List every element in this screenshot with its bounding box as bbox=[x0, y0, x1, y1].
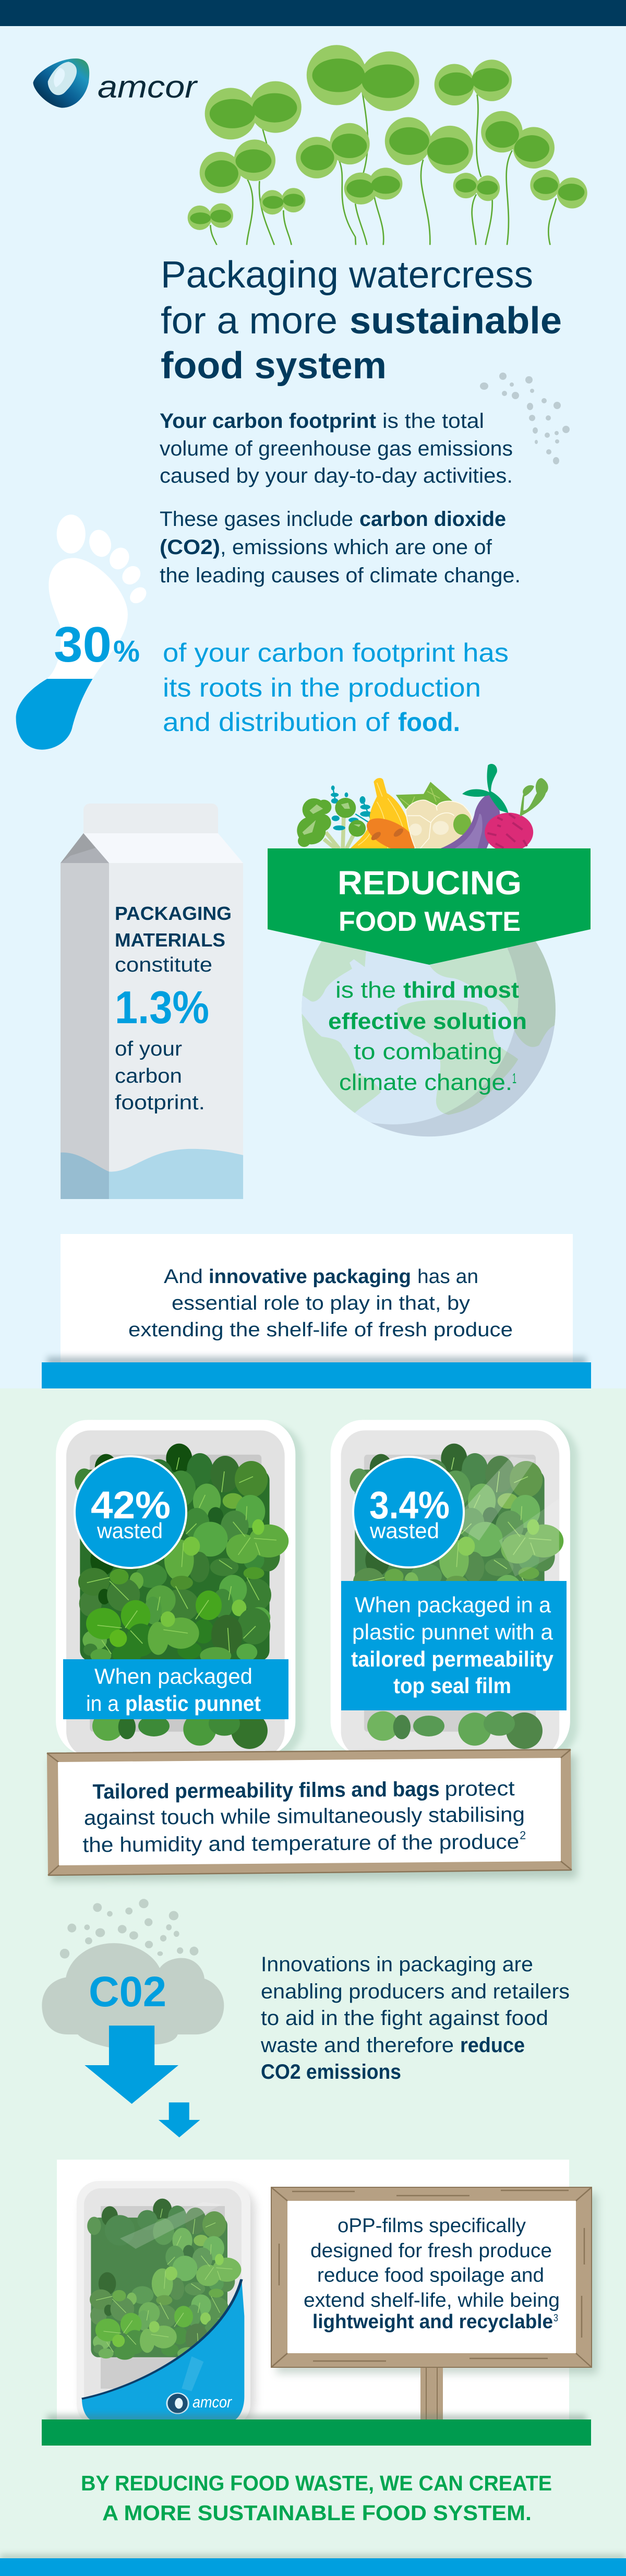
icon: footprint filled 30 percent bbox=[16, 514, 149, 750]
30% explanation text: of your carbon footprint has bbox=[163, 638, 509, 667]
CO2 dots above the cloud bbox=[60, 1899, 198, 1959]
decorative CO2 dots near the title bbox=[480, 373, 570, 464]
30% explanation text: food. bbox=[398, 708, 460, 737]
carbon footprint definition text: Your carbon footprint bbox=[160, 410, 376, 433]
wooden sign: tailored permeability films: Tailored permeability films and bags bbox=[92, 1778, 440, 1803]
carbon footprint definition text: These gases include bbox=[160, 508, 353, 531]
wooden sign: tailored permeability films: protect bbox=[444, 1777, 515, 1801]
wooden sign: tailored permeability films: against touch while simultaneously stabilising bbox=[84, 1803, 525, 1829]
carton text: packaging materials 1.3%: MATERIALS bbox=[115, 929, 225, 951]
globe text: third most effective solution: third most bbox=[403, 977, 519, 1003]
title: for a more bbox=[161, 300, 338, 342]
wooden sign: oPP films bbox=[271, 2187, 597, 2419]
innovations text: waste and therefore bbox=[260, 2034, 454, 2057]
punnet: tailored permeability top seal film, 3.4% wasted bbox=[331, 1420, 578, 1759]
carton text: packaging materials 1.3%: PACKAGING bbox=[115, 903, 232, 924]
carbon footprint definition text: caused by your day-to-day activities. bbox=[160, 464, 513, 487]
green shelf band bbox=[42, 2419, 591, 2446]
icon: CO2 cloud: C02 bbox=[89, 1968, 166, 2016]
wooden sign: oPP films: 3 bbox=[553, 2313, 558, 2324]
top navy band bbox=[0, 0, 626, 26]
title: Packaging watercress bbox=[161, 254, 533, 296]
banner: reducing food waste bbox=[268, 848, 591, 965]
punnet: plastic punnet, 42% wasted: wasted bbox=[97, 1518, 163, 1543]
wooden sign: oPP films: extend shelf-life, while being bbox=[304, 2290, 560, 2311]
title: sustainable bbox=[350, 300, 562, 342]
30% statistic: % bbox=[113, 634, 140, 668]
icon: CO2 cloud bbox=[42, 1943, 224, 2050]
punnet: plastic punnet, 42% wasted: plastic punnet bbox=[125, 1691, 261, 1716]
punnet: plastic punnet, 42% wasted: in a bbox=[86, 1691, 119, 1716]
innovations text bbox=[260, 1953, 570, 2083]
punnet: plastic punnet, 42% wasted: 42% bbox=[91, 1483, 171, 1527]
punnet: tailored permeability top seal film, 3.4% wasted: top seal film bbox=[393, 1673, 511, 1698]
30% explanation text bbox=[163, 638, 509, 737]
carton text: packaging materials 1.3%: footprint. bbox=[115, 1092, 205, 1114]
globe text: third most effective solution: to combating bbox=[354, 1039, 502, 1064]
globe text: third most effective solution: climate change. bbox=[339, 1070, 512, 1095]
carbon footprint definition text: the leading causes of climate change. bbox=[160, 564, 521, 587]
wooden sign: oPP films: designed for fresh produce bbox=[310, 2240, 552, 2262]
punnet: tailored permeability top seal film, 3.4% wasted: 3.4% bbox=[369, 1483, 450, 1527]
innovations text: to aid in the fight against food bbox=[261, 2007, 548, 2030]
globe text: third most effective solution: is the bbox=[335, 977, 396, 1003]
carbon footprint definition text bbox=[160, 410, 521, 587]
punnet: plastic punnet, 42% wasted bbox=[56, 1420, 304, 1759]
white panel: innovative packaging: has an bbox=[417, 1266, 478, 1288]
carton text: packaging materials 1.3%: carbon bbox=[115, 1065, 182, 1087]
vegetables illustration bbox=[297, 764, 548, 858]
carton text: packaging materials 1.3%: 1.3% bbox=[115, 981, 209, 1033]
wooden sign: tailored permeability films: 2 bbox=[520, 1829, 526, 1842]
globe bbox=[302, 941, 556, 1136]
carton text: packaging materials 1.3%: constitute bbox=[115, 954, 212, 976]
30% explanation text: and distribution of bbox=[163, 708, 389, 737]
wooden sign: tailored permeability films bbox=[47, 1750, 577, 1882]
innovations text: Innovations in packaging are bbox=[261, 1953, 533, 1976]
punnet: tailored permeability top seal film, 3.4% wasted: plastic punnet with a bbox=[352, 1620, 553, 1644]
white panel: oPP films bbox=[57, 2160, 569, 2421]
white panel: innovative packaging: And bbox=[164, 1266, 203, 1288]
innovations text: reduce bbox=[460, 2034, 525, 2057]
banner: reducing food waste: FOOD WASTE bbox=[339, 906, 521, 937]
30% explanation text: its roots in the production bbox=[163, 673, 481, 702]
white panel: innovative packaging: innovative packaging bbox=[209, 1266, 411, 1288]
packaged watercress with amcor film bbox=[77, 2181, 256, 2426]
title: food system bbox=[161, 345, 387, 387]
shadow above green shelf bbox=[47, 2415, 586, 2423]
banner: reducing food waste: REDUCING bbox=[338, 864, 522, 902]
shadow above bottom band bbox=[0, 2555, 626, 2561]
packaged watercress with amcor film: amcor bbox=[192, 2393, 232, 2411]
carbon footprint definition text: (CO2) bbox=[160, 536, 220, 559]
white panel: innovative packaging bbox=[47, 1234, 586, 1367]
innovations text: enabling producers and retailers bbox=[261, 1980, 570, 2003]
carton text: packaging materials 1.3% bbox=[115, 903, 232, 1114]
background: light green section bbox=[0, 1388, 626, 2576]
amcor logo bbox=[33, 58, 198, 108]
title bbox=[161, 254, 562, 387]
punnet: tailored permeability top seal film, 3.4% wasted: When packaged in a bbox=[355, 1592, 551, 1617]
punnet: plastic punnet, 42% wasted: When packaged bbox=[94, 1664, 252, 1688]
punnet: tailored permeability top seal film, 3.4% wasted: wasted bbox=[369, 1518, 439, 1543]
carbon footprint definition text: , emissions which are one of bbox=[220, 536, 492, 559]
watercress sprouts illustration bbox=[188, 45, 587, 245]
wooden sign: oPP films: oPP-films specifically bbox=[338, 2215, 526, 2237]
closing statement: BY REDUCING FOOD WASTE, WE CAN CREATE bbox=[81, 2471, 552, 2495]
closing statement: A MORE SUSTAINABLE FOOD SYSTEM. bbox=[102, 2501, 532, 2525]
blue shelf band bbox=[42, 1362, 591, 1388]
milk carton bbox=[61, 804, 243, 1199]
bottom blue band bbox=[0, 2558, 626, 2576]
carbon footprint definition text: is the total bbox=[382, 410, 484, 433]
closing statement bbox=[81, 2471, 552, 2525]
background: light blue section bbox=[0, 0, 626, 1388]
30% statistic: 30 bbox=[54, 617, 112, 673]
carbon footprint definition text: volume of greenhouse gas emissions bbox=[160, 437, 513, 460]
punnet: tailored permeability top seal film, 3.4% wasted: tailored permeability bbox=[351, 1647, 554, 1671]
wooden sign: oPP films: reduce food spoilage and bbox=[317, 2265, 544, 2286]
globe text: third most effective solution: 1 bbox=[512, 1070, 516, 1086]
arrow: large down arrow bbox=[85, 2026, 178, 2104]
carbon footprint definition text: carbon dioxide bbox=[359, 508, 506, 531]
wooden sign: tailored permeability films: the humidity and temperature of the produce bbox=[82, 1830, 519, 1856]
arrow: small down arrow bbox=[159, 2102, 200, 2137]
wooden sign: oPP films: lightweight and recyclable bbox=[312, 2311, 553, 2333]
amcor logo: amcor bbox=[98, 69, 198, 104]
carton text: packaging materials 1.3%: of your bbox=[115, 1038, 182, 1060]
white panel: innovative packaging: extending the shelf-life of fresh produce bbox=[128, 1319, 513, 1341]
globe text: third most effective solution: effective solution bbox=[328, 1009, 527, 1034]
white panel: innovative packaging: essential role to play in that, by bbox=[172, 1292, 470, 1314]
30% statistic bbox=[54, 617, 140, 673]
globe text: third most effective solution bbox=[328, 977, 527, 1095]
innovations text: CO2 emissions bbox=[261, 2060, 401, 2083]
